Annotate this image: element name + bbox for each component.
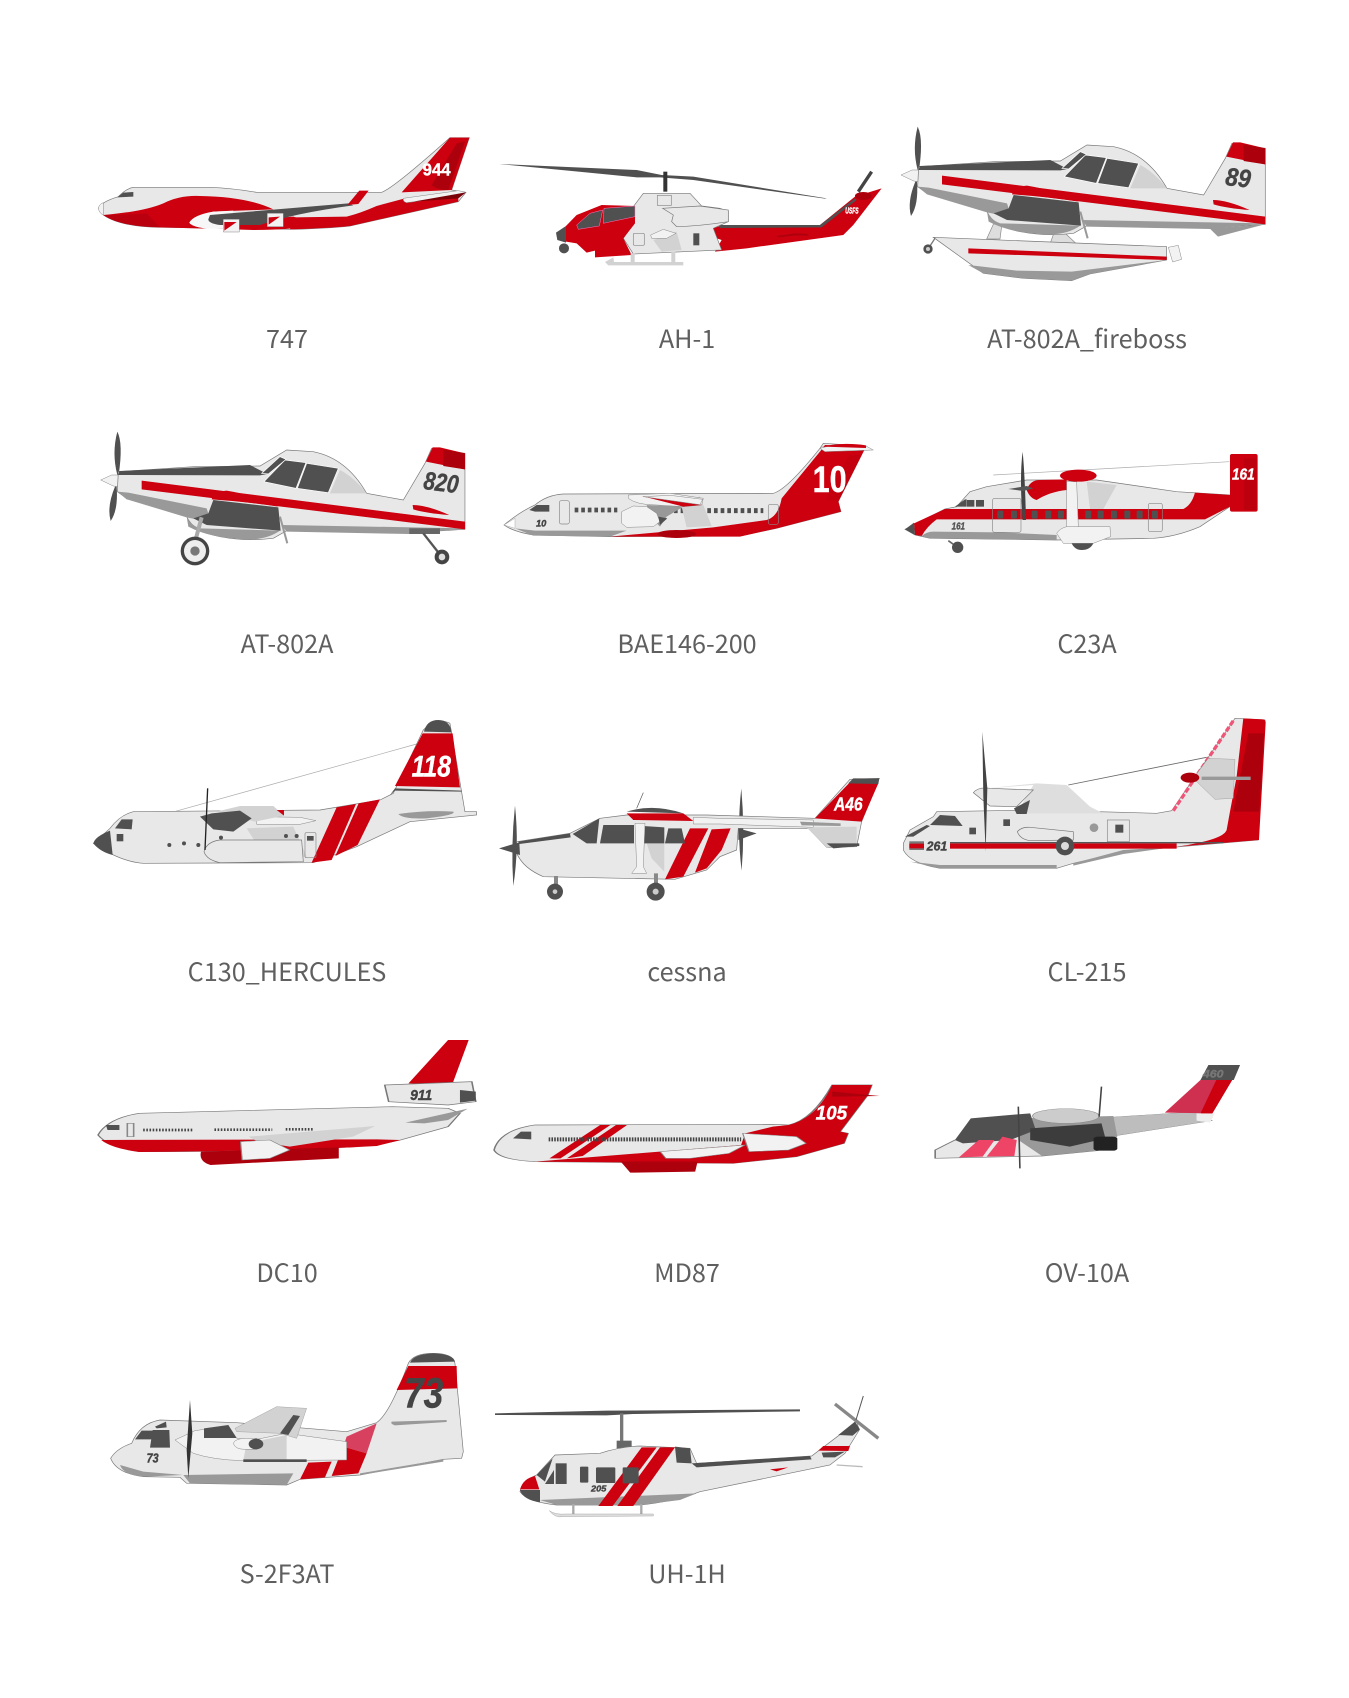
panel: S-2F3AT [111,1353,463,1591]
skids [549,1504,653,1517]
panel: C23A [905,452,1258,661]
panel: BAE146-200 [504,443,873,661]
aircraft: AT-802A [101,432,465,565]
aircraft: CL-215 [903,718,1266,868]
tail rotor [835,1396,878,1467]
panel: AH-1 [499,164,882,356]
tail number: 118 [412,751,451,784]
tail number: 820 [422,467,460,499]
label: AT-802A_fireboss: AT-802A_fireboss [987,320,1187,356]
tail number: A46 [833,794,863,815]
aircraft: MD87 [494,1085,880,1173]
aircraft: BAE146-200 [504,443,873,538]
label: AT-802A: AT-802A [241,625,334,661]
aircraft: C130 Hercules [93,720,477,863]
aircraft: OV-10A [935,1065,1240,1168]
aircraft: AT-802A fireboss [901,127,1265,281]
nose number: 73 [147,1452,159,1466]
label: UH-1H: UH-1H [648,1555,726,1591]
panel: cessna [499,778,879,989]
windows [955,499,1158,519]
tail number: 73 [404,1370,444,1418]
aircraft: 747 [98,138,469,232]
nose number: 161 [952,521,965,532]
floats [923,213,1182,281]
label: MD87: MD87 [654,1254,720,1290]
label: AH-1: AH-1 [659,320,715,356]
label: cessna: cessna [647,953,727,989]
aircraft: MD87: 105 [816,1102,848,1124]
label: C23A: C23A [1057,625,1117,661]
tail number: 89 [1224,163,1252,194]
panel: UH-1H [495,1396,878,1591]
label: S-2F3AT: S-2F3AT [240,1555,334,1591]
aircraft: UH-1H [495,1396,878,1517]
panel: OV-10A [935,1065,1240,1290]
aircraft: DC10 [98,1040,476,1165]
panel: AT-802A_fireboss [901,127,1265,356]
panel: DC10 [98,1040,476,1290]
nose number: 10 [536,518,547,528]
aircraft: cessna [499,778,879,901]
tail number: 10 [813,458,847,500]
fuselage stripe [909,841,1223,850]
nose number: 261 [926,840,947,854]
panel: MD87 [494,1085,880,1290]
tail number: 944 [423,160,451,180]
aircraft: S-2F3AT [111,1353,463,1485]
label: DC10: DC10 [256,1254,318,1290]
cabin windows [575,503,617,517]
label: BAE146-200: BAE146-200 [617,625,757,661]
aircraft: DC10: 911 [410,1087,432,1103]
panel: CL-215 [903,718,1266,989]
panel: C130_HERCULES [93,720,477,989]
label: OV-10A: OV-10A [1045,1254,1130,1290]
panel: 747 [98,138,469,356]
landing gear [181,517,449,565]
label: CL-215: CL-215 [1048,953,1126,989]
label: C130_HERCULES: C130_HERCULES [188,953,386,989]
tail marking: USFS [845,207,859,216]
wheels [547,873,665,901]
fin number: 161 [1232,467,1255,484]
aircraft: OV-10A: 460 [1202,1067,1224,1080]
panel: AT-802A [101,432,465,661]
label: 747: 747 [266,320,308,356]
aircraft: AH-1 [499,164,882,265]
aircraft: C23A [905,452,1258,553]
cabin number: 205 [590,1483,607,1493]
